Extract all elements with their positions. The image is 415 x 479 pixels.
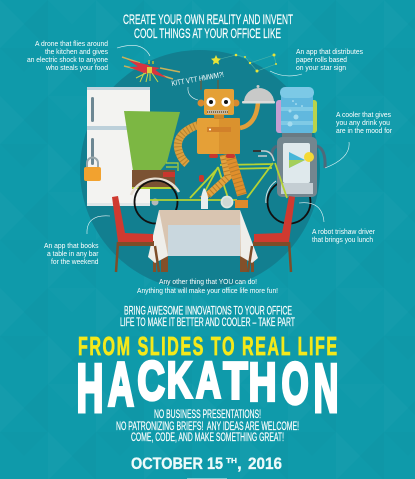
constellation icon: [211, 54, 277, 72]
callout: cooler: A cooler that gives: [336, 110, 391, 119]
callout: drone: who steals your food: [45, 63, 108, 72]
right chair: [248, 196, 295, 272]
heading: hackathon: K: [167, 352, 192, 409]
callout: anything else: Anything that will make your office life more fun!: [137, 286, 278, 295]
callout: trishaw: A robot trishaw driver: [312, 227, 375, 236]
trishaw cart: [124, 111, 180, 188]
heading: hackathon: A: [196, 353, 221, 409]
callout: table booking: a table in any bar: [47, 249, 99, 258]
right wheel: [266, 180, 310, 224]
callout: drone: [27, 39, 108, 72]
callout: drone: A drone that flies around: [35, 39, 108, 48]
robot body: [197, 118, 240, 154]
handlebar: [254, 151, 274, 161]
title: COOL THINGS AT YOUR OFFICE LIKE: [134, 25, 281, 41]
cropped next line: [187, 478, 227, 479]
intro text: LIFE TO MAKE IT BETTER AND COOLER – TAKE PART: [120, 317, 295, 329]
title: CREATE YOUR OWN REALITY AND INVENT: [123, 11, 293, 27]
callout: cooler: you any drink you: [336, 118, 390, 127]
bicycle frame: [150, 151, 287, 208]
callout: anything else: Any other thing that YOU can do!: [159, 277, 257, 286]
icon: padlock: [84, 158, 101, 181]
heading: hackathon: A: [108, 351, 134, 419]
callout: table booking: An app that books: [44, 241, 99, 250]
intro text: [120, 306, 295, 329]
callout: trishaw: that brings you lunch: [312, 235, 373, 244]
details text: NO BUSINESS PRESENTATIONS!: [154, 409, 261, 421]
food cloche: [242, 85, 275, 104]
callout: trishaw: [312, 227, 375, 244]
tablecloth: [148, 210, 258, 263]
callout: drone: an electric shock to anyone: [27, 55, 108, 64]
icon: drone: [122, 57, 180, 82]
callout: cooler: are in the mood for: [336, 126, 392, 135]
left chair: [112, 196, 159, 272]
callout: anything else: [137, 277, 278, 295]
water jug: [276, 87, 317, 137]
cooler arms: [272, 146, 325, 168]
lemon: [304, 152, 314, 162]
cooler body: [277, 137, 317, 197]
heading: hackathon: H: [249, 352, 276, 412]
heading: hackathon: [77, 349, 338, 427]
heading: hackathon: N: [314, 351, 338, 427]
callout: table booking: for the weekend: [51, 257, 98, 266]
icon: fridge: [84, 87, 150, 206]
callout: drone: the kitchen and gives: [45, 47, 108, 56]
table legs: [153, 255, 254, 272]
heading: hackathon: C: [137, 351, 165, 412]
callout: paper rolls app: paper rolls based: [296, 55, 347, 64]
details text: [116, 409, 299, 444]
heading: from slides to real life: FROM SLIDES TO REAL LIFE: [78, 331, 337, 361]
left wheel: [131, 179, 179, 224]
icon: robot: [178, 80, 275, 208]
callout: cooler: [336, 110, 392, 135]
vase: [201, 188, 208, 209]
robot head: [214, 113, 224, 119]
heading: hackathon: T: [223, 351, 248, 410]
heading: hackathon: H: [77, 349, 103, 426]
callout arrows: [87, 45, 349, 234]
details text: NO PATRONIZING BRIEFS! ANY IDEAS ARE WELCOME!: [116, 421, 299, 433]
event date: ,: [237, 454, 242, 473]
robot speech: KITT VTT HMWM?!: [171, 70, 225, 88]
illustration backdrop circle: [80, 50, 320, 290]
heading: hackathon: O: [282, 353, 309, 417]
callout: paper rolls app: on your star sign: [296, 63, 346, 72]
flower: [199, 175, 204, 182]
title: [123, 11, 293, 41]
play icon on screen: [289, 152, 305, 168]
intro text: BRING AWESOME INNOVATIONS TO YOUR OFFICE: [124, 306, 292, 318]
callout: paper rolls app: An app that distributes: [296, 47, 363, 56]
event date: 2016: [248, 454, 282, 473]
callout: table booking: [44, 241, 99, 266]
water cooler: [272, 87, 325, 197]
robot right arm: [240, 103, 258, 128]
robot left arm: [178, 125, 198, 164]
robot legs: [208, 155, 242, 195]
details text: COME, CODE, AND MAKE SOMETHING GREAT!: [131, 432, 284, 444]
dining table: [148, 175, 258, 272]
callout: paper rolls app: [296, 47, 363, 72]
event date: TH: [226, 456, 237, 465]
event date: OCTOBER 15: [131, 454, 223, 473]
